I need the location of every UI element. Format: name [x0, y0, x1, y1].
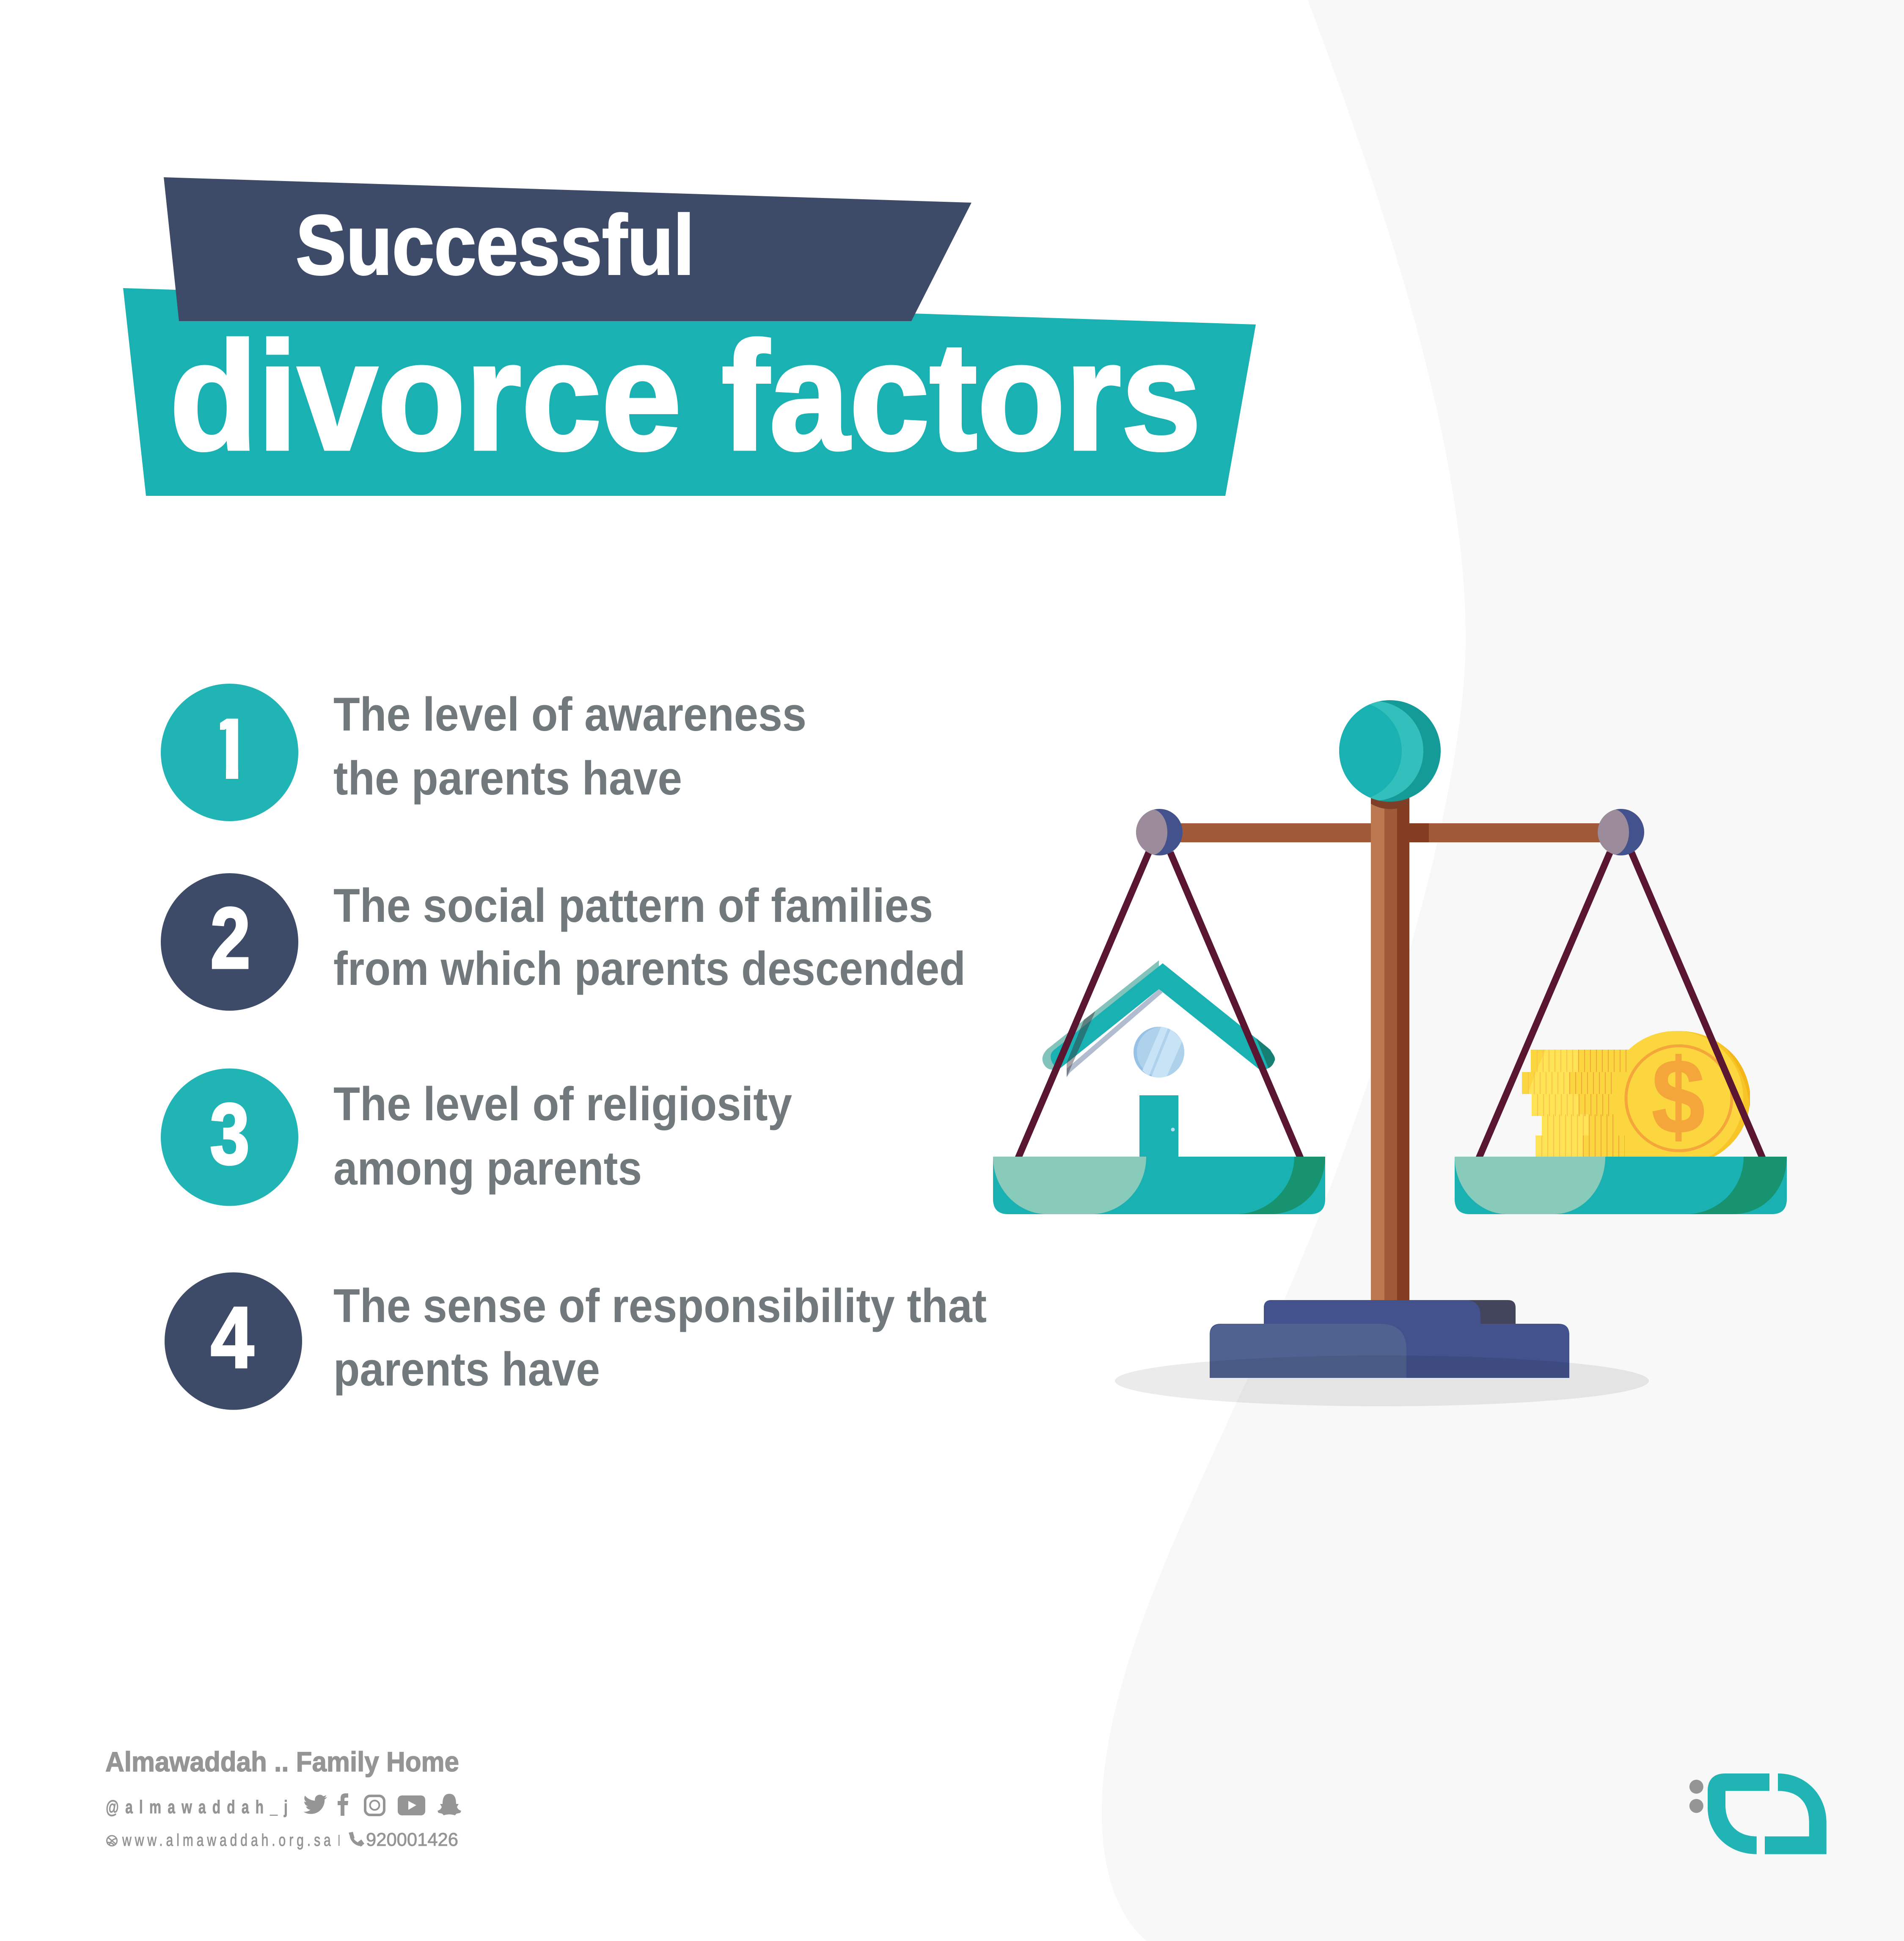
- factor 3 text: The level of religiosity: [333, 1078, 792, 1130]
- social handle: @almawaddah_j: [106, 1797, 288, 1817]
- icon: youtube: [398, 1795, 425, 1815]
- balance scale illustration: [993, 700, 1787, 1406]
- icon: house on left pan: [1043, 960, 1275, 1157]
- number badge 2: 2: [210, 890, 250, 987]
- icon: twitter: [303, 1795, 327, 1814]
- icon: phone: [349, 1832, 364, 1847]
- logo right bracket: [1765, 1773, 1827, 1854]
- factor 3: [161, 1069, 792, 1206]
- house door: [1139, 1095, 1178, 1157]
- right pan ropes: [1479, 852, 1763, 1158]
- number badge 4: [165, 1273, 302, 1410]
- logo: [1689, 1773, 1827, 1854]
- footer title: Almawaddah .. Family Home: [105, 1746, 459, 1777]
- factor 3 text: among parents: [333, 1142, 642, 1195]
- left joint: [1136, 809, 1183, 855]
- dollar sign: $: [1652, 1037, 1705, 1155]
- icon: snapchat: [437, 1794, 461, 1815]
- factor 1 text: [333, 688, 806, 805]
- top ball: [1339, 700, 1441, 802]
- separator: [338, 1835, 339, 1846]
- factor 2 text: from which parents descended: [333, 942, 966, 995]
- logo left bracket: [1708, 1773, 1769, 1854]
- footer contact block: [105, 1746, 461, 1850]
- number badge 1: 1: [206, 700, 254, 797]
- heading: Successful: Successful: [296, 198, 694, 292]
- house window: [1134, 1026, 1188, 1079]
- base shadow: [1115, 1355, 1649, 1406]
- pole: [1371, 796, 1409, 1300]
- factor 1: [161, 684, 806, 821]
- factor 2: [161, 873, 966, 1011]
- factor 4 text: parents have: [333, 1343, 600, 1396]
- beam: [1176, 823, 1607, 842]
- number badge 1: [161, 684, 298, 821]
- icon: globe: [107, 1836, 117, 1846]
- number badge 2: [161, 873, 298, 1011]
- factor 2 text: [333, 879, 966, 995]
- phone number: 920001426: [366, 1829, 458, 1850]
- icon: instagram: [365, 1796, 384, 1815]
- icon: gold coins on right pan: [1522, 1031, 1750, 1166]
- number badge 3: 3: [210, 1086, 250, 1182]
- left pan: [993, 1157, 1325, 1214]
- number badge 3: [161, 1069, 298, 1206]
- factor 4: [165, 1273, 987, 1410]
- number badge 4: 4: [211, 1289, 254, 1386]
- factor 4 text: The sense of responsibility that: [333, 1279, 987, 1332]
- title banner: [123, 177, 1256, 496]
- right joint: [1598, 809, 1644, 855]
- scale base: [1210, 1300, 1569, 1378]
- factor 1 text: the parents have: [333, 752, 682, 805]
- icon: facebook: [338, 1793, 348, 1816]
- factor 3 text: [333, 1078, 792, 1195]
- factor 1 text: The level of awareness: [333, 688, 806, 741]
- factor 2 text: The social pattern of families: [333, 879, 933, 932]
- teal banner shape: [123, 288, 1256, 496]
- logo dots: [1689, 1780, 1703, 1813]
- right pan: [1455, 1157, 1787, 1214]
- factor 4 text: [333, 1279, 987, 1396]
- heading: divorce factors: divorce factors: [170, 310, 1201, 482]
- left pan ropes: [1018, 852, 1301, 1158]
- website: www.almawaddah.org.sa: [122, 1831, 331, 1850]
- navy banner shape: [164, 177, 971, 321]
